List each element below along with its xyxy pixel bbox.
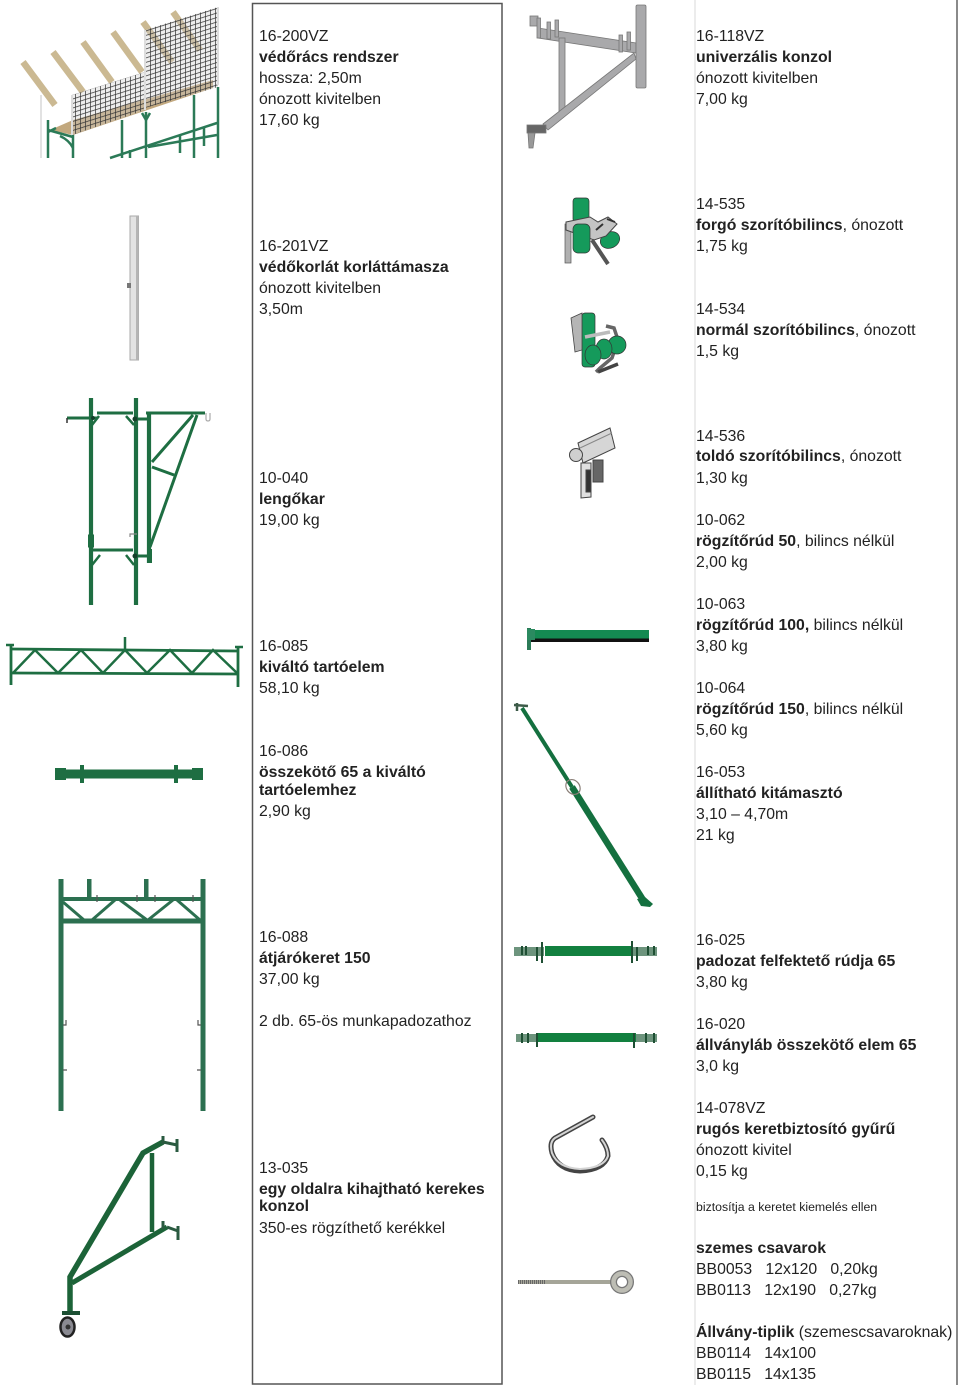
text: 16-200VZ: 16-200VZ: [259, 28, 328, 45]
icon: swing arm 10-040: [67, 398, 210, 605]
text: 14-534: normál szorítóbilincs, ónozott: [696, 322, 915, 339]
text: 16-200VZ: hossza: 2,50m: [259, 70, 362, 87]
icon: truss beam 16-085: [6, 637, 243, 687]
text: 16-118VZ: [696, 28, 832, 108]
text: 16-053: [696, 764, 843, 844]
text: 16-201VZ: 3,50m: [259, 301, 303, 318]
text: scaffold dowels: Állvány-tiplik (szemescsavaroknak): [696, 1324, 952, 1341]
panel: left description frame: [252, 4, 502, 1384]
text: 65-ös note: 2 db. 65-ös munkapadozathoz: [259, 1013, 472, 1030]
text: 10-064: [696, 680, 903, 739]
text: 10-040: lengőkar: [259, 491, 325, 508]
text: 14-534: [696, 301, 916, 360]
text: 16-053: állítható kitámasztó: [696, 785, 843, 802]
text: 10-062: rögzítőrúd 50, bilincs nélkül: [696, 533, 894, 550]
text: 16-025: [696, 932, 895, 991]
text: 10-040: 19,00 kg: [259, 512, 320, 529]
text: scaffold dowels: [696, 1323, 952, 1383]
icon: universal bracket 16-118VZ: [527, 5, 646, 148]
text: 10-062: [696, 512, 894, 571]
text: 14-078VZ: ónozott kivitel: [696, 1142, 792, 1159]
text: 16-086: tartóelemhez: [259, 782, 356, 799]
text: scaffold dowels: BB0115 14x135: [696, 1366, 816, 1383]
text: 16-118VZ: 16-118VZ: [696, 28, 764, 45]
text: 16-025: 3,80 kg: [696, 974, 748, 991]
text: 16-053: 3,10 – 4,70m: [696, 806, 788, 823]
text: note: biztosítja a keretet kiemelés ellen: [696, 1200, 877, 1214]
text: 13-035: konzol: [259, 1198, 309, 1215]
text: 16-020: 16-020: [696, 1016, 745, 1033]
text: 16-085: kiváltó tartóelem: [259, 659, 385, 676]
text: 16-201VZ: [259, 238, 449, 318]
text: 16-200VZ: ónozott kivitelben: [259, 91, 381, 108]
text: 14-536: 1,30 kg: [696, 470, 748, 487]
icon: spring ring 14-078VZ: [551, 1117, 608, 1171]
icon: guardrail support post 16-201VZ: [127, 216, 138, 360]
text: 10-040: [259, 470, 325, 529]
text: 16-020: [696, 1016, 916, 1075]
text: 16-118VZ: ónozott kivitelben: [696, 70, 818, 87]
icon: protective mesh system 16-200VZ: [23, 7, 218, 158]
text: 10-064: 10-064: [696, 680, 745, 697]
text: 13-035: egy oldalra kihajtható kerekes: [259, 1181, 485, 1198]
icon: joint coupler 14-536: [570, 428, 615, 498]
text: 14-536: [696, 428, 902, 487]
text: 16-085: 58,10 kg: [259, 680, 320, 697]
icon: swivel coupler 14-535: [565, 198, 622, 264]
text: 10-063: 10-063: [696, 596, 745, 613]
text: eye bolts: BB0053 12x120 0,20kg: [696, 1261, 878, 1278]
text: 16-086: [259, 743, 426, 820]
text: 14-536: 14-536: [696, 428, 745, 445]
text: 16-201VZ: ónozott kivitelben: [259, 280, 381, 297]
text: 16-201VZ: 16-201VZ: [259, 238, 328, 255]
text: 14-534: 14-534: [696, 301, 745, 318]
text: 16-118VZ: 7,00 kg: [696, 91, 748, 108]
text: 10-063: rögzítőrúd 100, bilincs nélkül: [696, 617, 903, 634]
text: 10-040: 10-040: [259, 470, 308, 487]
text: 16-025: padozat felfektető rúdja 65: [696, 953, 895, 970]
text: 16-020: állványláb összekötő elem 65: [696, 1037, 916, 1054]
text: eye bolts: [696, 1240, 878, 1299]
text: 14-078VZ: 0,15 kg: [696, 1163, 748, 1180]
text: 16-088: 37,00 kg: [259, 971, 320, 988]
text: 10-062: 2,00 kg: [696, 554, 748, 571]
text: 16-053: 21 kg: [696, 827, 735, 844]
text: 16-053: 16-053: [696, 764, 745, 781]
text: 13-035: 350-es rögzíthető kerékkel: [259, 1220, 445, 1237]
text: 16-200VZ: 17,60 kg: [259, 112, 320, 129]
text: 16-025: 16-025: [696, 932, 745, 949]
text: 16-200VZ: [259, 28, 399, 129]
icon: connector 16-086: [55, 765, 203, 783]
text: 14-535: 14-535: [696, 196, 745, 213]
text: 16-020: 3,0 kg: [696, 1058, 739, 1075]
text: 14-534: 1,5 kg: [696, 343, 739, 360]
text: 16-200VZ: védőrács rendszer: [259, 49, 399, 66]
text: 16-088: 16-088: [259, 929, 308, 946]
text: 13-035: 13-035: [259, 1160, 308, 1177]
text: 16-088: [259, 929, 371, 988]
icon: anchor tube 10-062: [527, 628, 649, 650]
text: 14-078VZ: [696, 1100, 895, 1180]
icon: eye bolt: [518, 1274, 630, 1290]
text: 10-063: 3,80 kg: [696, 638, 748, 655]
text: 16-118VZ: univerzális konzol: [696, 49, 832, 66]
text: 14-078VZ: 14-078VZ: [696, 1100, 765, 1117]
text: 16-201VZ: védőkorlát korláttámasza: [259, 259, 449, 276]
vertical separator right column: [694, 0, 696, 1385]
text: 14-536: toldó szorítóbilincs, ónozott: [696, 448, 901, 465]
text: scaffold dowels: BB0114 14x100: [696, 1345, 816, 1362]
text: 14-535: 1,75 kg: [696, 238, 748, 255]
icon: platform bearer 16-025: [514, 941, 657, 963]
text: 16-086: 16-086: [259, 743, 308, 760]
text: 16-086: 2,90 kg: [259, 803, 311, 820]
icon: adjustable brace 16-053: [514, 703, 653, 907]
text: eye bolts: BB0113 12x190 0,27kg: [696, 1282, 877, 1299]
icon: wheeled bracket 13-035: [60, 1136, 178, 1336]
text: 10-063: [696, 596, 903, 655]
right page edge line: [956, 0, 958, 1385]
text: 14-078VZ: rugós keretbiztosító gyűrű: [696, 1121, 895, 1138]
icon: passage frame 16-088: [58, 879, 206, 1111]
text: 16-085: [259, 638, 385, 697]
text: 16-088: átjárókeret 150: [259, 950, 371, 967]
icon: standard coupler 14-534: [571, 313, 626, 372]
text: 14-535: forgó szorítóbilincs, ónozott: [696, 217, 903, 234]
text: 10-064: rögzítőrúd 150, bilincs nélkül: [696, 701, 903, 718]
text: 13-035: [259, 1160, 485, 1237]
icon: standard connector 16-020: [516, 1033, 657, 1048]
text: 10-064: 5,60 kg: [696, 722, 748, 739]
text: 16-086: összekötő 65 a kiváltó: [259, 764, 426, 781]
text: 16-085: 16-085: [259, 638, 308, 655]
text: 10-062: 10-062: [696, 512, 745, 529]
text: eye bolts: szemes csavarok: [696, 1240, 826, 1257]
text: 14-535: [696, 196, 904, 255]
